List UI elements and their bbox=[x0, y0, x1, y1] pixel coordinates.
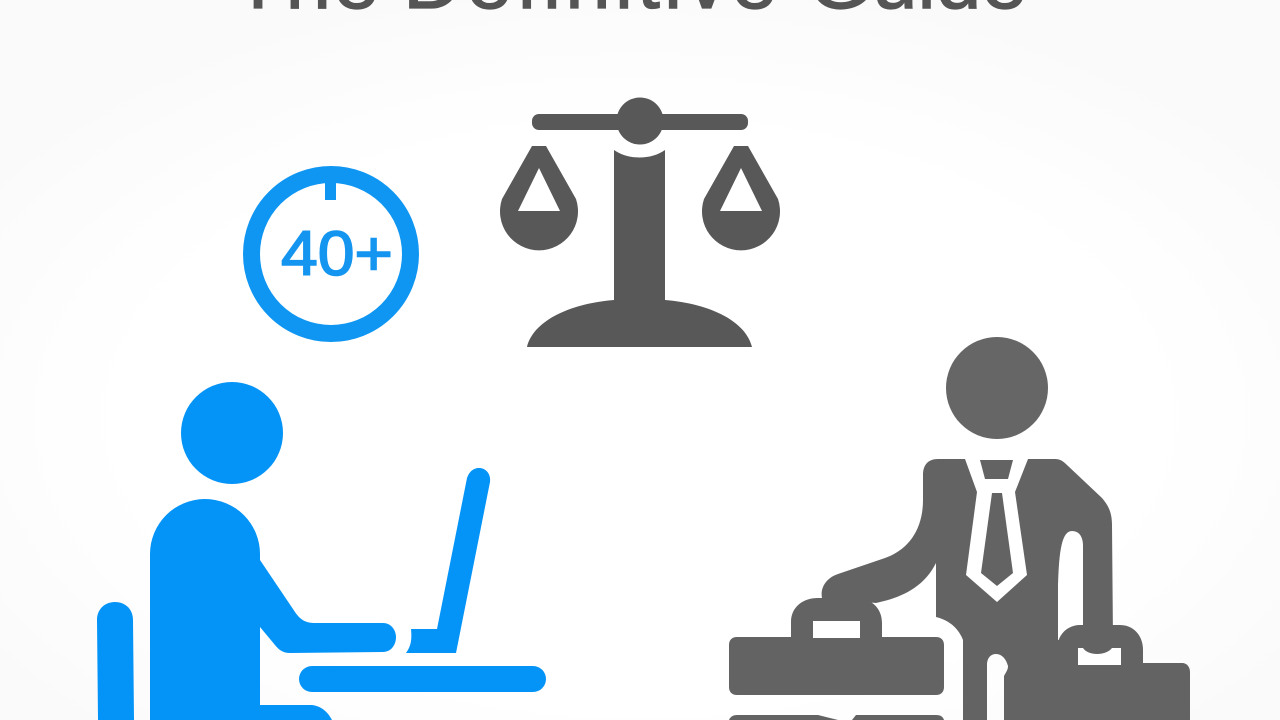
title bbox=[233, 0, 1027, 26]
icon: 40+ clock badge: 40+ bbox=[281, 219, 393, 289]
left briefcase bbox=[729, 598, 944, 720]
icon: 40+ clock badge bbox=[252, 174, 410, 334]
icon: person at laptop bbox=[97, 382, 546, 720]
white gap between arm and torso bbox=[1058, 531, 1083, 640]
necktie and collar bbox=[965, 459, 1028, 602]
right briefcase handle bbox=[1057, 625, 1143, 680]
icon: businessman with briefcases bbox=[729, 337, 1190, 720]
handle opening of right briefcase bbox=[1078, 648, 1121, 665]
icon: balance scale bbox=[500, 98, 780, 347]
